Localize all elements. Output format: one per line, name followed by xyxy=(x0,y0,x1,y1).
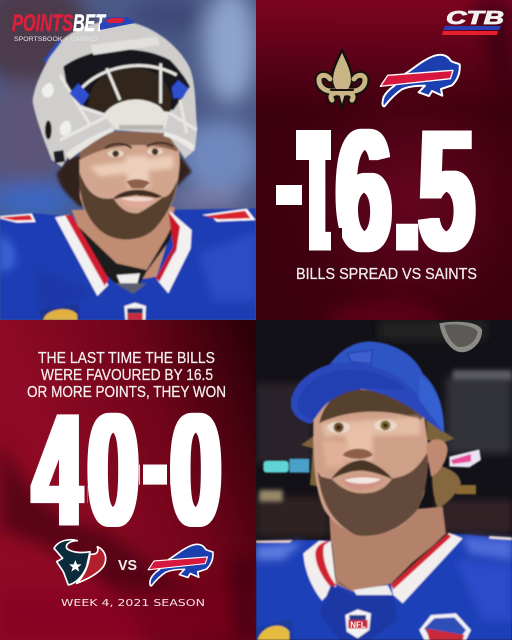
logo: CTB: CTB xyxy=(446,8,504,28)
big number: -16.5: -16.5 xyxy=(273,83,475,287)
logo: Bills bison small xyxy=(148,544,213,586)
text: VS: VS xyxy=(118,558,137,574)
big number: -16.5 xyxy=(276,128,476,252)
logo: CTB xyxy=(442,8,504,35)
logo: Bills bison xyxy=(380,55,460,106)
text: week and season: WEEK 4, 2021 SEASON xyxy=(61,598,205,609)
logo: PointsBet xyxy=(12,10,135,43)
intro text: WERE FAVOURED BY 16.5 xyxy=(41,367,213,384)
panel: bottom-left result xyxy=(0,320,256,640)
logo: Saints fleur-de-lis xyxy=(319,50,365,108)
panel: top-right spread xyxy=(256,0,512,350)
logo: PointsBet: SPORTSBOOK + CASINO xyxy=(14,36,97,43)
panel: bottom-right player photo: NFL xyxy=(350,621,366,630)
intro text: OR MORE POINTS, THEY WON xyxy=(27,384,226,401)
logo: PointsBet: POINTS xyxy=(12,10,73,37)
logo: PointsBet: BET xyxy=(73,10,107,37)
logo: Texans xyxy=(54,540,106,585)
shaded swoosh xyxy=(0,440,256,640)
intro text: THE LAST TIME THE BILLS xyxy=(38,350,215,367)
caption: bills spread: BILLS SPREAD VS SAINTS xyxy=(296,266,477,283)
big score: 40-0: 40-0 xyxy=(33,371,221,559)
panel: bottom-right player photo xyxy=(256,320,512,640)
intro text xyxy=(27,350,226,401)
panel: top-left player photo xyxy=(0,0,256,320)
